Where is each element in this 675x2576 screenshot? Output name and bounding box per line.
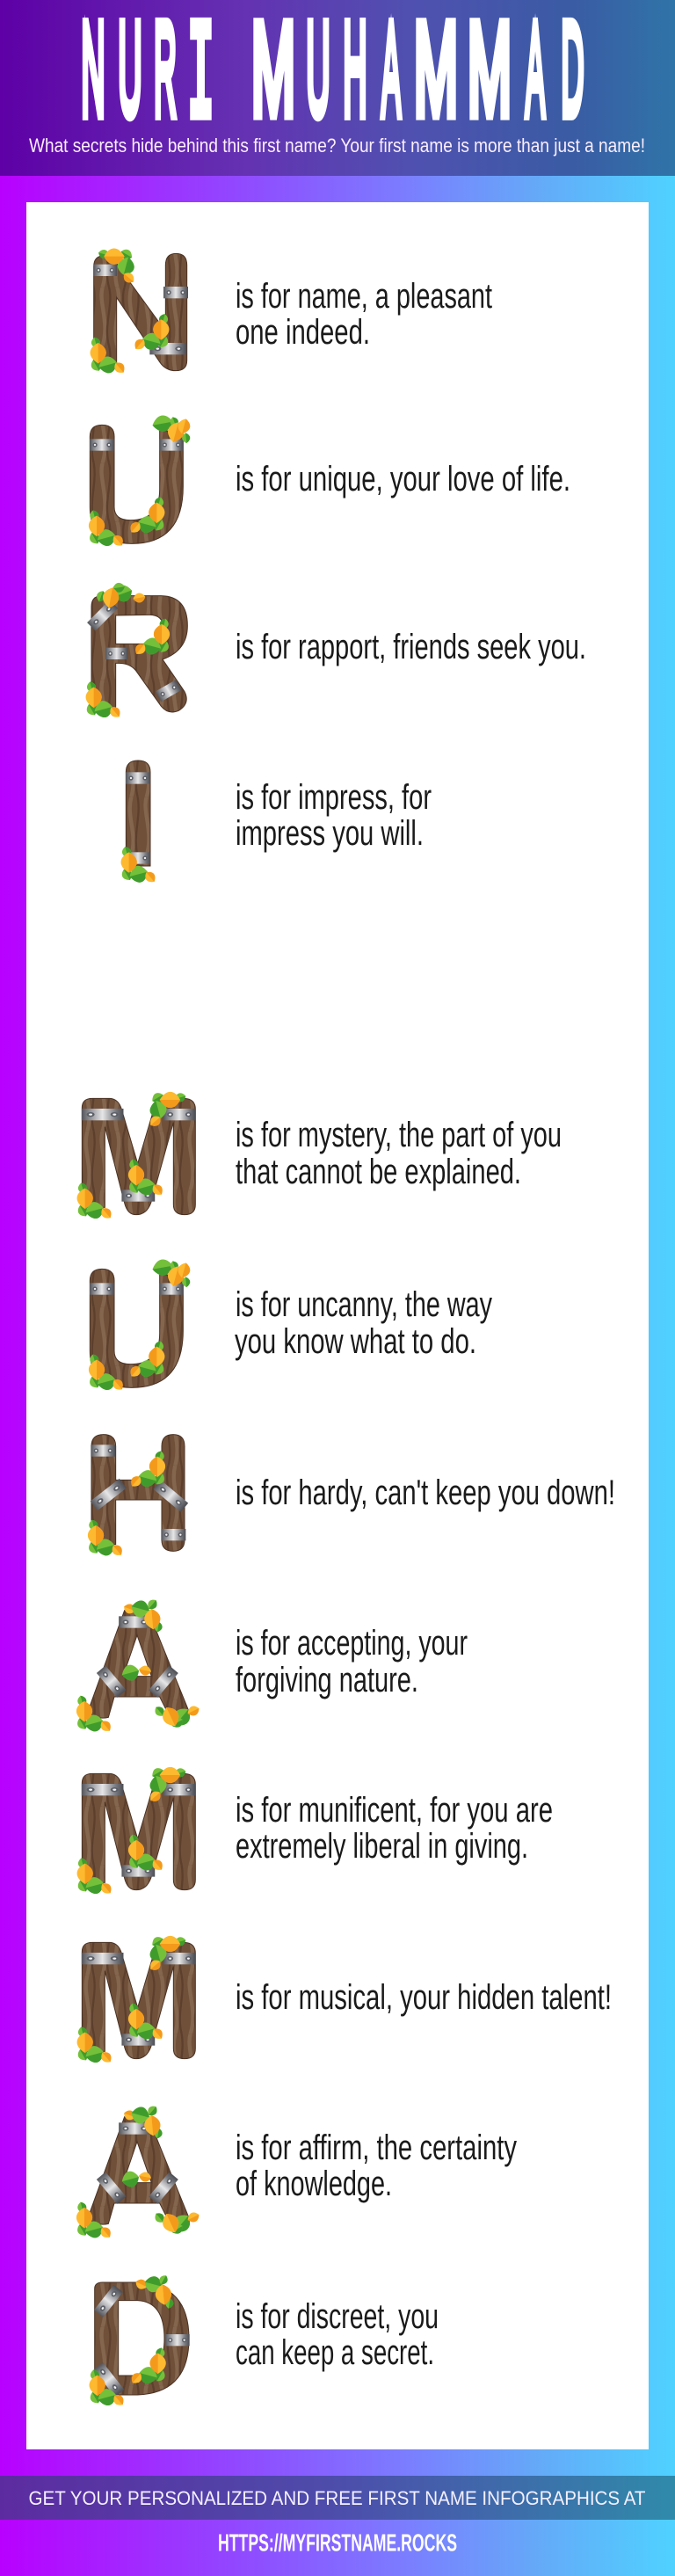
text: M line: is for munificent, for you are — [236, 1791, 553, 1830]
text: D line: is for discreet, you — [236, 2297, 439, 2336]
text: A line: is for affirm, the certainty — [236, 2128, 517, 2167]
title: M — [468, 0, 512, 143]
title: M — [414, 0, 458, 143]
text: A line — [236, 1624, 468, 1699]
icon: wood letter M — [76, 1934, 195, 2065]
text: I line: impress you will. — [236, 814, 424, 853]
text: M line — [236, 1116, 562, 1191]
text: M line: that cannot be explained. — [236, 1153, 521, 1191]
text: I line — [236, 778, 432, 853]
text: D line: can keep a secret. — [236, 2333, 434, 2372]
title: U — [306, 0, 330, 143]
row: M second — [76, 1765, 553, 1896]
row: N — [89, 247, 492, 375]
title: U — [118, 0, 142, 143]
icon: wood letter D — [88, 2274, 190, 2408]
text: M line: extremely liberal in giving. — [236, 1827, 528, 1866]
row: H — [86, 1435, 615, 1558]
text: N line — [236, 277, 492, 352]
icon: wood letter N — [89, 247, 188, 375]
row: A second — [75, 2104, 517, 2240]
icon: wood letter R — [84, 582, 187, 720]
footer url: HTTPS://MYFIRSTNAME.ROCKS — [218, 2529, 457, 2557]
text: D line — [236, 2297, 439, 2372]
title: D — [562, 0, 584, 143]
row: D — [88, 2274, 439, 2408]
text: I line: is for impress, for — [236, 778, 432, 817]
text: A line: forgiving nature. — [236, 1661, 418, 1699]
icon: wood letter M — [76, 1765, 195, 1896]
text: A line — [236, 2128, 517, 2203]
text: M line — [236, 1791, 553, 1866]
icon: wood letter U — [87, 1258, 192, 1393]
row: U second — [87, 1258, 492, 1393]
icon: wood letter A — [75, 2104, 201, 2240]
row: M third — [76, 1934, 612, 2065]
row: A — [75, 1597, 468, 1734]
text: N line: is for name, a pleasant — [236, 277, 492, 316]
text: M line: is for mystery, the part of you — [236, 1116, 562, 1154]
text: U line — [235, 1285, 492, 1361]
text: N line: one indeed. — [236, 313, 370, 352]
text: U line: is for uncanny, the way — [236, 1285, 492, 1324]
icon: wood letter H — [86, 1435, 188, 1558]
title — [81, 0, 584, 156]
title: M — [251, 0, 295, 143]
footer call to action: GET YOUR PERSONALIZED AND FREE FIRST NAME INFOGRAPHICS AT — [28, 2487, 645, 2509]
text: A line: of knowledge. — [236, 2165, 392, 2203]
icon: wood letter M — [76, 1090, 195, 1221]
text: U line: you know what to do. — [235, 1322, 476, 1361]
title: A — [381, 0, 401, 143]
icon: wood letter I — [120, 760, 158, 885]
title: N — [81, 0, 105, 143]
title: A — [526, 0, 545, 143]
header band — [0, 0, 675, 176]
title: H — [343, 0, 367, 143]
text: A line: is for accepting, your — [236, 1624, 468, 1663]
title: I — [187, 1, 214, 156]
footer band — [0, 2476, 675, 2520]
row: I — [120, 760, 432, 885]
icon: wood letter U — [87, 414, 192, 549]
row: R — [84, 582, 586, 720]
icon: wood letter A — [75, 1597, 201, 1734]
row: U — [87, 414, 570, 549]
title: R — [154, 0, 177, 143]
row: M — [76, 1090, 562, 1221]
